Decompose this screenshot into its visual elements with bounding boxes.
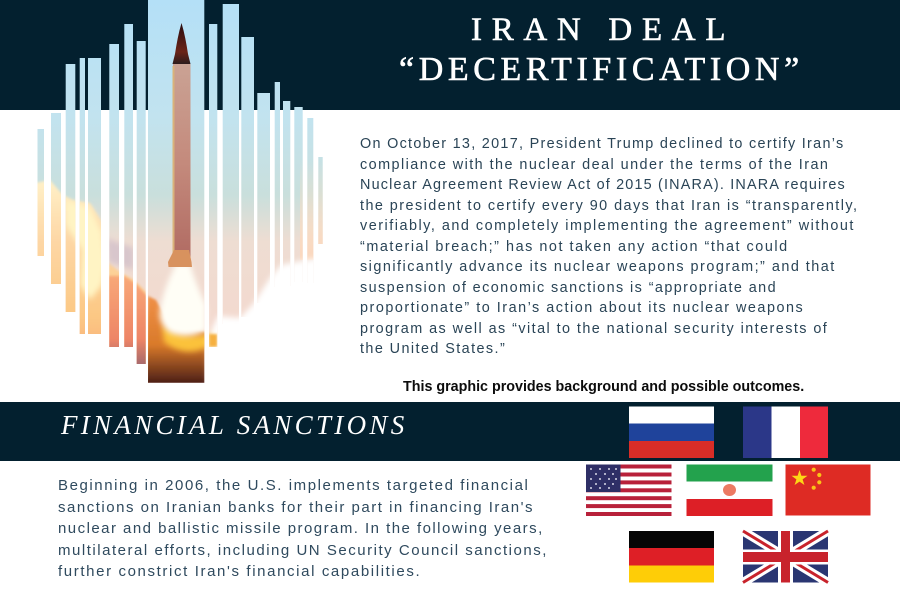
flag: China bbox=[786, 464, 870, 516]
flag: Iran bbox=[686, 464, 772, 516]
text: program as well as “vital to the national security interests of bbox=[360, 320, 828, 336]
text: the president to certify every 90 days that Iran is “transparently, bbox=[360, 198, 858, 214]
text: On October 13, 2017, President Trump declined to certify Iran’s bbox=[360, 136, 844, 152]
header band bbox=[0, 0, 900, 110]
salmon lower cloud bbox=[107, 276, 147, 366]
sanctions text: sanctions on Iranian banks for their part in financing Iran's bbox=[58, 498, 534, 516]
flag: Russia bbox=[629, 406, 714, 458]
text: verifiably, and completely implementing the agreement” without bbox=[360, 218, 855, 234]
base cloud bbox=[146, 296, 208, 385]
flag: United Kingdom bbox=[743, 531, 828, 582]
text: the United States.” bbox=[360, 341, 506, 357]
sanctions text: multilateral efforts, including UN Security Council sanctions, bbox=[58, 542, 548, 558]
orange corner under cloud bbox=[209, 334, 217, 347]
sanctions text: nuclear and ballistic missile program. In the following years, bbox=[58, 520, 544, 537]
graphic note: This graphic provides background and possible outcomes. bbox=[403, 379, 804, 395]
missile bbox=[168, 23, 192, 267]
sanctions text bbox=[58, 477, 548, 580]
text: Nuclear Agreement Review Act of 2015 (INARA). INARA requires bbox=[360, 177, 846, 193]
shaded gap in cloud bbox=[109, 239, 133, 270]
text: significantly advance its nuclear weapons program;” and that bbox=[360, 259, 836, 275]
section band: financial sanctions bbox=[0, 402, 900, 461]
sanctions text: Beginning in 2006, the U.S. implements targeted financial bbox=[58, 477, 529, 494]
text: suspension of economic sanctions is “appropriate and bbox=[360, 280, 777, 296]
flag: Germany bbox=[629, 531, 714, 582]
exhaust flame bbox=[160, 264, 206, 336]
flag: USA bbox=[586, 464, 672, 516]
flag: France bbox=[743, 406, 828, 458]
title bbox=[399, 12, 804, 88]
missile image in vertical bars bbox=[38, 0, 323, 383]
left cloud bbox=[30, 180, 148, 390]
left cloud highlights bbox=[66, 203, 101, 300]
yellow fire rim bbox=[162, 325, 218, 351]
title: IRAN DEAL bbox=[471, 12, 735, 48]
right white cloud bbox=[203, 256, 314, 382]
far right peach haze bbox=[300, 176, 323, 260]
text: proportionate” to Iran’s action about its nuclear weapons bbox=[360, 300, 804, 316]
text: compliance with the nuclear deal under the terms of the Iran bbox=[360, 156, 829, 172]
section heading: FINANCIAL SANCTIONS bbox=[61, 410, 408, 440]
sky bbox=[38, 0, 323, 383]
text: “material breach;” has not taken any action “that could bbox=[360, 238, 789, 254]
title: “DECERTIFICATION” bbox=[399, 51, 804, 88]
sanctions text: further constrict Iran's financial capabilities. bbox=[58, 563, 421, 580]
